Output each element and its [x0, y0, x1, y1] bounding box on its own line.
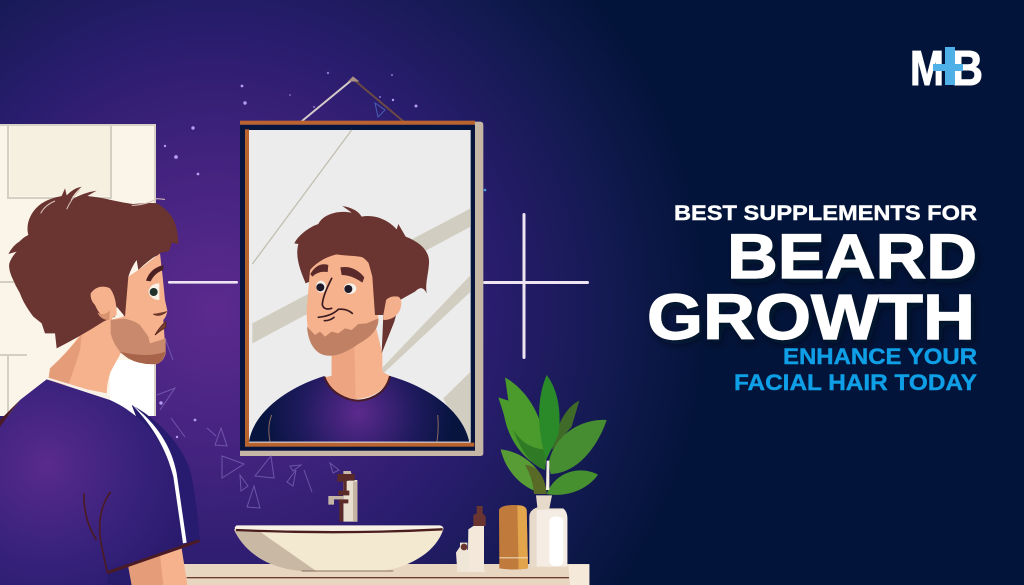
faint triangles — [157, 103, 385, 508]
reflection: eyebrows — [310, 264, 364, 283]
amber cylinder — [499, 505, 528, 569]
faucet — [328, 471, 357, 522]
reflection: face — [307, 253, 378, 355]
shirt — [0, 379, 200, 585]
sleeve cuff — [107, 541, 199, 573]
light cross right — [483, 213, 589, 359]
reflection: eyes — [316, 281, 356, 294]
neck shade — [48, 335, 82, 385]
title block — [647, 202, 977, 395]
reflection: neck — [324, 323, 390, 399]
basin shadow side — [234, 529, 317, 571]
mirror frame — [240, 121, 483, 456]
logo — [910, 42, 983, 96]
logo: B — [952, 42, 983, 96]
dropper bottle — [468, 506, 486, 572]
reflection: collar — [324, 376, 390, 401]
reflection: neck shade — [324, 347, 356, 399]
subtitle line 2: FACIAL HAIR TODAY — [734, 370, 977, 395]
tiled wall panel — [0, 124, 156, 416]
mirror — [240, 121, 483, 456]
hair — [8, 187, 178, 348]
logo plus — [933, 47, 963, 85]
reflection: shirt — [249, 376, 469, 442]
outer sleeve panel — [132, 405, 200, 545]
plant — [498, 375, 607, 495]
basin rim — [235, 525, 443, 531]
light cross left — [168, 281, 238, 284]
mirror glass — [249, 130, 471, 443]
arm — [128, 548, 187, 585]
title line 1: BEST SUPPLEMENTS FOR — [674, 202, 977, 225]
logo letters: M — [910, 42, 944, 96]
reflection: sleeve creases — [269, 415, 438, 442]
jaw beard shade — [119, 352, 166, 364]
title beard: BEARD — [727, 222, 977, 292]
man from behind — [8, 187, 178, 393]
ear — [91, 287, 117, 320]
eyebrow — [146, 265, 163, 281]
sleeve seam — [84, 492, 111, 573]
white collar trim — [48, 379, 110, 397]
small bottle — [456, 543, 472, 572]
reflection: hair fringe — [298, 230, 392, 315]
title growth: GROWTH — [647, 281, 975, 353]
reflection: nose and mouth — [318, 278, 352, 321]
eye — [148, 283, 159, 300]
white sleeve stripe — [133, 405, 187, 543]
countertop — [183, 564, 589, 585]
reflection: beard — [307, 318, 378, 356]
shirt body — [0, 379, 187, 585]
hair highlights — [41, 189, 165, 213]
reflection: ear — [383, 296, 401, 320]
mirror hanging wire — [302, 77, 403, 121]
toiletries — [456, 495, 567, 572]
star particles — [159, 72, 486, 438]
face — [110, 253, 167, 364]
sink basin — [234, 525, 443, 571]
subtitle line 1: ENHANCE YOUR — [783, 344, 977, 369]
side beard — [111, 319, 166, 364]
reflection: hair back — [294, 206, 429, 353]
neck — [48, 317, 121, 393]
nose and moustache — [153, 311, 167, 335]
glass vase — [529, 495, 567, 567]
back shoulder shadow — [0, 400, 20, 427]
